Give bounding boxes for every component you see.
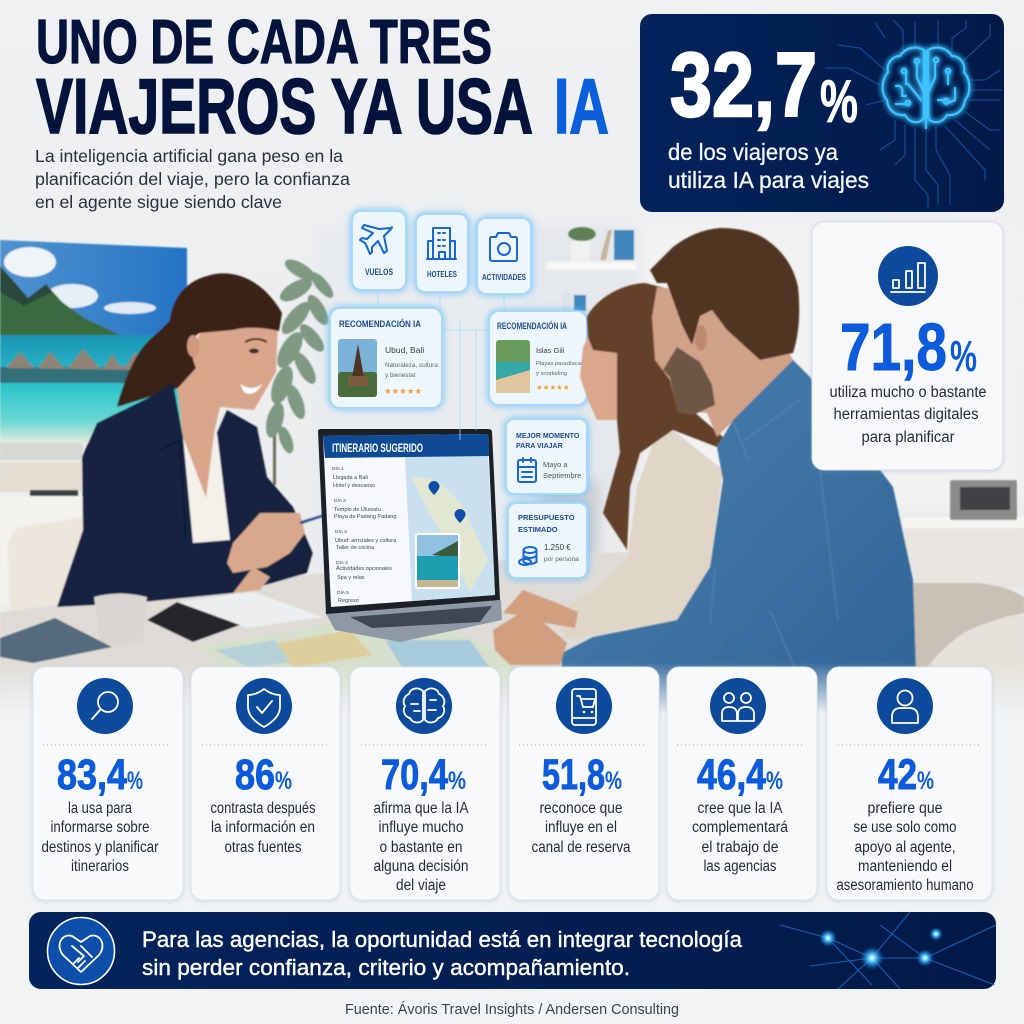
icon: brain [396,678,452,734]
panel: 42%: se use solo como [854,819,956,836]
laptop base [325,600,502,642]
sweater [556,430,723,640]
icon: bar chart [878,246,938,306]
recommendation card: Islas Gili: Playas paradíacas [536,361,584,367]
beard [663,347,715,415]
recommendation card: Islas Gili: y snorkeling [536,371,567,377]
left sideboard and stacked folders [0,443,85,606]
number: 70,4 [381,751,448,799]
beach photo [496,340,530,393]
recommendation card: Ubud: RECOMENDACIÓN IA [339,318,421,330]
number: 86 [235,751,275,799]
itinerary screen [323,434,495,607]
number: 83,4 [57,751,127,799]
floating card: presupuesto: 1.250 € [544,543,571,552]
right side room: counter and oven [903,480,1024,588]
panel: 42%: asesoramiento humano [836,877,974,894]
panel: 51,8% [509,667,659,900]
title: IA [554,62,609,150]
itinerary list: Regreso [338,598,359,604]
floating card: mejor momento [506,419,587,494]
hands with pen [227,513,305,573]
itinerary list: Actividades opcionales [336,566,392,572]
floating card: hoteles [416,214,468,292]
icon: shield [236,678,292,734]
floating card: vuelos [352,211,406,290]
banner: conclusion [29,912,996,989]
label: VUELOS [365,267,393,277]
floating card: mejor momento: Septiembre [543,471,581,480]
itinerary list: Spa y relax [337,575,365,581]
panel: 86%: % [275,767,292,795]
panel: 71,8% digital tools: herramientas digitales [834,406,979,423]
fade into bottom area [0,662,1024,714]
panel: 32,7% headline stat [640,14,1004,212]
banner: conclusion: sin perder confianza, criterio y acompañamiento. [142,955,630,980]
laptop screen bezel [318,429,500,614]
neck and face [652,287,793,437]
itinerary list: Llegada a Bali [333,475,368,481]
agent [57,273,325,607]
wall shelf with plant and books [546,227,637,311]
circuit lines [825,20,1002,208]
subtitle: planificación del viaje, pero la confianza [35,169,350,189]
panel: 46,4%: el trabajo de [702,839,778,856]
itinerary list: DÍA 5 [337,589,349,596]
itinerary list: DÍA 2 [334,497,346,504]
itinerary list: Playa de Padang Padang [334,514,396,520]
panel: 32,7% headline stat: % [820,68,858,135]
blazer [57,383,313,607]
floating card: mejor momento: MEJOR MOMENTO [516,433,580,440]
caption: cree que la IA [698,800,783,817]
panel: 51,8%: influye en el [545,819,617,836]
white shirt [183,433,230,545]
room walls [312,225,1024,575]
panel: 70,4%: del viaje [396,877,446,894]
banner text: Para las agencias, la oportunidad está en integrar tecnología [142,927,743,952]
panel: 70,4%: influye mucho [378,819,464,836]
caption: utiliza mucho o bastante [830,384,986,401]
panel: 70,4%: o bastante en [380,839,462,856]
eye, brow, smile [245,339,267,342]
panel: 32,7% headline stat: utiliza IA para viajes [668,167,869,193]
panel: 51,8%: % [605,767,622,795]
panel: 71,8% digital tools: para planificar [862,429,954,446]
recommendation card: Islas Gili [489,311,587,405]
man [493,228,918,730]
recommendation card: Islas Gili: Islas Gili [536,346,565,355]
ear [187,335,199,357]
panel: 42%: % [917,767,934,795]
icon: phone with cart [556,678,612,734]
panel: 70,4%: alguna decisión [374,858,468,875]
panel: 71,8% digital tools [812,222,1003,470]
left chair [8,517,84,610]
connection lines [378,290,504,440]
recommendation card: Ubud [330,308,442,408]
beach thumbnail [415,533,460,589]
young woman [556,283,723,640]
right chair [913,583,1024,700]
itinerary list: Hotel y descanso [333,483,375,489]
neck and chest [177,320,278,498]
panel: 83,4%: destinos y planificar [42,839,158,856]
number: 42 [878,751,917,799]
panel: 46,4%: las agencias [704,858,777,875]
icon: coins [519,547,536,565]
caption: afirma que la IA [374,800,469,817]
panel: 46,4%: complementará [692,819,788,836]
face [580,337,618,420]
subtitle [35,146,350,212]
title: UNO DE CADA TRES [36,8,492,77]
recommendation card: Ubud: y bienestar [385,372,416,379]
laptop [318,429,502,642]
title: VIAJEROS YA USA [36,62,533,150]
floating card: presupuesto: ESTIMADO [518,525,558,534]
itinerary list: Taller de cocina [336,545,375,551]
panel: 42% [827,667,992,900]
floating card: presupuesto [508,503,587,578]
number: 46,4 [697,751,766,799]
caption: reconoce que [540,800,622,817]
denim shirt [560,360,918,730]
icon: magnifier [77,678,133,734]
itinerary list: Templo de Uluwatu [334,507,381,513]
wall poster: tropical beach [0,240,187,443]
caption: la usa para [68,800,132,817]
icon: two people [710,678,766,734]
hair [650,228,799,360]
photo: couple in the foreground [493,228,1024,730]
ponytail and hair [117,273,282,407]
temple photo [338,339,377,397]
panel: 46,4%: % [766,767,783,795]
icon: handshake heart [48,918,114,984]
panel: 86%: otras fuentes [224,839,302,856]
panel: 86% [191,667,340,900]
panel: 70,4%: % [448,767,466,795]
subtitle: en el agente sigue siendo clave [35,192,282,212]
panel: 83,4% [33,667,183,900]
caption: prefiere que [868,800,942,817]
source: Fuente: Ávoris Travel Insights / Andersen Consulting [345,1001,679,1018]
desk items [0,592,520,690]
icon: camera [490,233,517,261]
panel: 71,8% digital tools: % [950,332,977,381]
caption: contrasta después [210,800,316,817]
panel: 51,8%: canal de reserva [532,839,631,856]
icon: plane [360,225,392,254]
panel: 70,4% [350,667,500,900]
icon: hotel building [427,228,456,259]
icon: person [877,678,933,734]
panel: 83,4%: itinerarios [71,858,129,875]
recommendation card: Ubud: Naturaleza, cultura [385,362,438,369]
subtitle: La inteligencia artificial gana peso en la [35,146,343,166]
itinerary list [332,465,397,604]
long hair [587,283,723,550]
hands [493,590,578,665]
caption: de los viajeros ya [668,139,838,165]
network decoration [780,912,996,989]
icon: calendar [518,458,536,482]
itinerary list: DÍA 4 [336,559,348,566]
shirt seams [710,400,838,680]
map pins [428,481,466,523]
itinerary list: DÍA 1 [332,465,344,472]
recommendation card: Ubud: ★★★★★ [384,386,422,396]
big number: 32,7 [670,35,817,136]
floating card: mejor momento: Mayo a [543,460,568,469]
ear [695,325,707,351]
recommendation card: Islas Gili: RECOMENDACIÓN IA [497,320,567,331]
recommendation card: Islas Gili: ★★★★★ [536,383,570,392]
floating card: actividades [477,218,531,294]
recommendation card: Ubud: Ubud, Bali [385,345,424,355]
panel: 42%: manteniendo el [858,858,952,875]
panel: 42%: apoyo al agente, [854,839,956,856]
itinerary list: Ubud: arrozales y cultura [335,538,397,544]
photo: office with the travel agent [0,225,1024,730]
panel: 83,4%: % [127,767,143,795]
number: 71,8 [840,310,947,385]
itinerary list: DÍA 3 [335,528,347,535]
panel: 83,4%: informarse sobre [50,819,150,836]
floating card: mejor momento: PARA VIAJAR [516,443,563,450]
floating card: presupuesto: por persona [544,556,579,563]
floating card: presupuesto: PRESUPUESTO [518,513,575,522]
panel: 86%: la información en [211,819,315,836]
title [36,8,609,150]
plant behind agent [263,255,337,485]
number: 51,8 [542,751,605,799]
desk surface [0,552,1024,730]
itinerary screen: ITINERARIO SUGERIDO [332,443,423,455]
icon: glowing brain [883,48,969,128]
panel: 46,4% [667,667,817,900]
label: ACTIVIDADES [482,273,527,282]
label: HOTELES [427,269,457,279]
